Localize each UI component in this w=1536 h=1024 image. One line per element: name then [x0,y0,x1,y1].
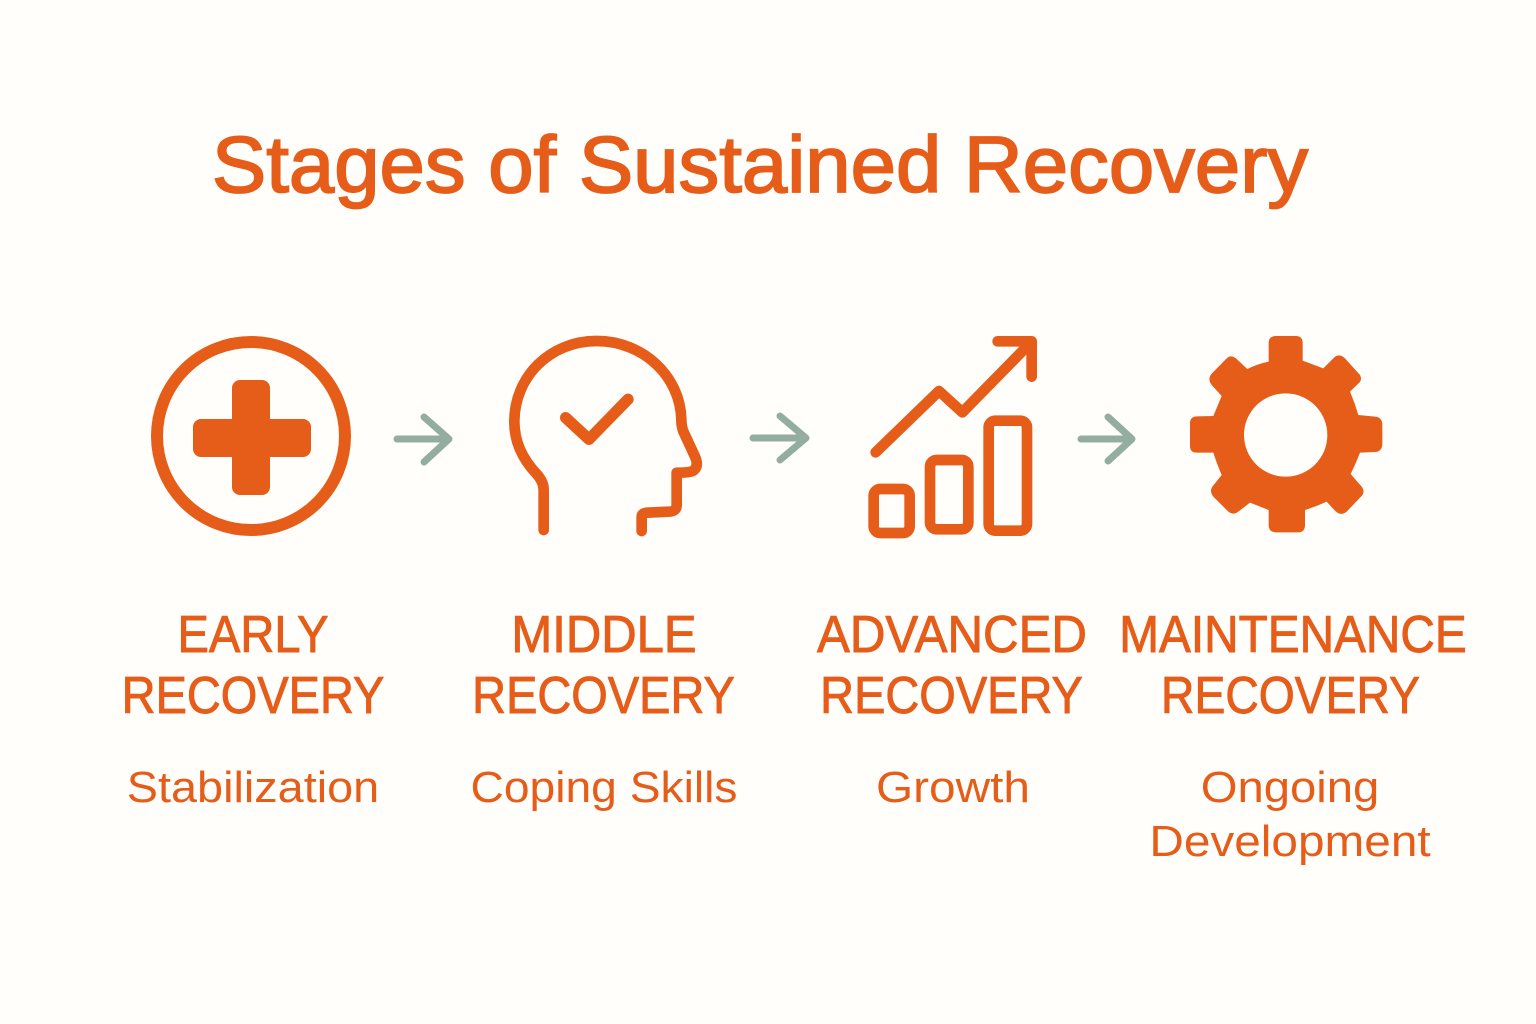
subtext: ongoing development: Ongoing [1201,763,1379,812]
heading: advanced recovery: RECOVERY [820,667,1083,725]
heading: maintenance recovery [1119,606,1467,725]
heading: middle recovery [472,606,735,725]
heading: maintenance recovery: MAINTENANCE [1119,606,1467,664]
subtext: coping skills: Coping Skills [470,763,738,812]
icon: head with check mark [514,341,697,531]
arrow 2 [753,416,806,460]
heading: advanced recovery [816,606,1087,725]
subtext: growth: Growth [876,763,1030,812]
title: Stages of Sustained Recovery [212,120,1308,209]
arrow 1 [397,417,449,462]
subtext: ongoing development [1149,763,1431,866]
subtext: ongoing development: Development [1149,817,1431,866]
arrow 3 [1081,417,1132,461]
heading: early recovery [122,606,384,725]
icon: gear [1190,336,1382,532]
heading: early recovery: EARLY [177,606,328,664]
icon: growth bars with arrow [874,341,1032,533]
heading: advanced recovery: ADVANCED [817,606,1087,664]
subtext: stabilization: Stabilization [127,763,379,812]
heading: middle recovery: RECOVERY [472,667,735,725]
heading: middle recovery: MIDDLE [511,606,697,664]
heading: maintenance recovery: RECOVERY [1161,667,1420,725]
heading: early recovery: RECOVERY [122,667,384,725]
icon: medical cross in circle [157,342,345,530]
